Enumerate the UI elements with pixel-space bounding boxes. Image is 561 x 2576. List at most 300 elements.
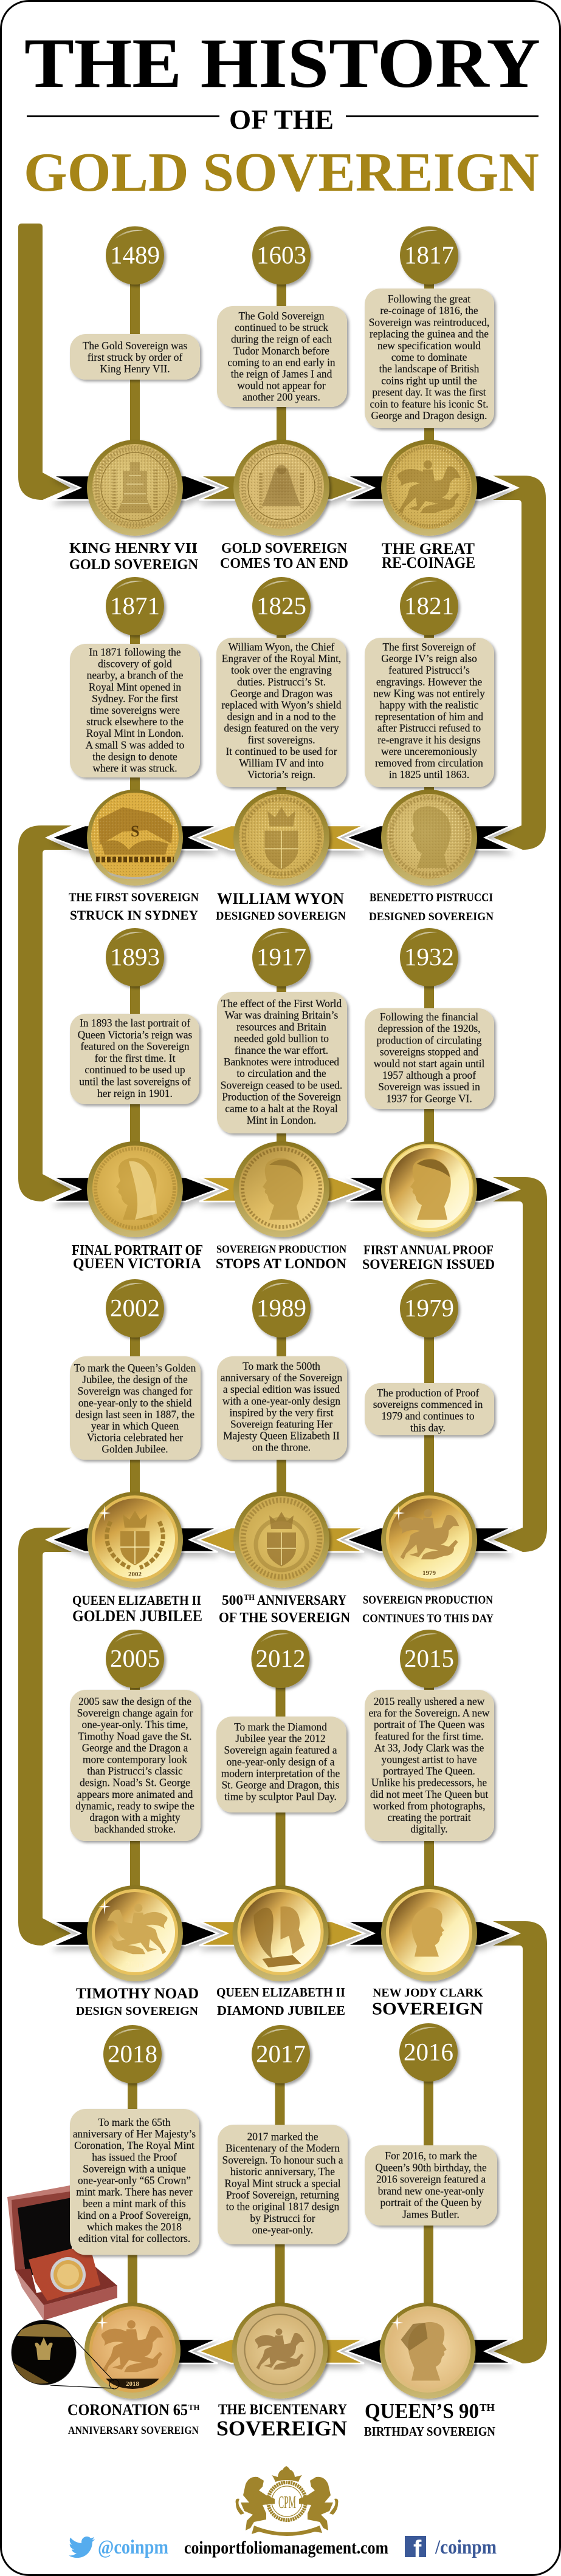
text box: removed from circulation (375, 757, 483, 769)
text box: to circulation and the (236, 1067, 326, 1079)
year badge (400, 928, 458, 986)
text box: continued to be struck (235, 321, 328, 333)
coin (232, 2303, 328, 2399)
text box: The first Sovereign of (382, 641, 476, 653)
year badge: 1817 (404, 241, 454, 268)
text box: this day. (410, 1421, 446, 1433)
panel: 1821 (365, 577, 494, 923)
ribbon arrows: row 1 (52, 476, 512, 500)
text box: dragon with a mighty (89, 1811, 181, 1823)
text box (218, 2125, 348, 2244)
title: SOVEREIGN (216, 2417, 347, 2441)
year badge (106, 577, 164, 635)
twitter handle: @coinpm (98, 2537, 168, 2558)
heading: Of The: OF THE (229, 104, 334, 135)
year badge (400, 1279, 458, 1338)
title: STRUCK IN SYDNEY (70, 907, 198, 923)
text box: 2016 sovereign featured a (376, 2173, 486, 2185)
facebook handle: /coinpm (435, 2537, 497, 2558)
coin: 2005 (126, 1960, 144, 1970)
ribbon arrows: row 2 (52, 825, 512, 850)
text box: portrait of The Queen was (374, 1718, 484, 1730)
text box (365, 2145, 497, 2226)
title: KING HENRY VII (69, 541, 198, 556)
title: CORONATION 65 (67, 2401, 188, 2419)
coin: S (131, 822, 139, 840)
text box: design and in a nod to the (227, 711, 336, 723)
text box: appears more animated and (77, 1788, 193, 1800)
ribbon arrows: row 3 (52, 1177, 512, 1201)
text box: year in which Queen (91, 1420, 179, 1432)
coin: 1979 (422, 1570, 436, 1577)
text box: one-year-only “65 Crown” (78, 2175, 191, 2187)
coin (381, 440, 477, 536)
text box: were unceremoniously (381, 745, 477, 757)
icon: twitter bird (69, 2537, 95, 2558)
year badge: 1825 (256, 592, 306, 620)
text box (365, 1008, 494, 1109)
text box: At 33, Jody Clark was the (374, 1741, 484, 1754)
logo: CPM crest (236, 2466, 338, 2536)
text box (216, 638, 346, 787)
panel: 2016 (364, 2023, 497, 2439)
year badge: 2002 (110, 1294, 160, 1322)
logo: CPM crest: CPM (278, 2493, 296, 2512)
title: THE GREAT (382, 540, 475, 558)
title: SOVEREIGN PRODUCTION (216, 1243, 346, 1255)
year badge (252, 1279, 311, 1338)
coin (233, 1141, 329, 1237)
text box: For 2016, to mark the (385, 2150, 477, 2162)
text box: The Gold Sovereign (238, 310, 325, 322)
text box: William Wyon, the Chief (229, 641, 335, 653)
text box: in 1825 until 1863. (389, 768, 469, 781)
text box: Following the financial (380, 1011, 478, 1023)
coin: 2002 (128, 1571, 142, 1578)
ribbon arrows: row 4 (52, 1528, 512, 1552)
ribbon (252, 2526, 322, 2536)
text box: one-year-only. This time, (82, 1718, 188, 1730)
text box: Sovereign featuring Her (230, 1418, 332, 1430)
text box (365, 638, 494, 787)
title: ANNIVERSARY (257, 1593, 346, 1608)
text box: worked from photographs, (373, 1800, 485, 1812)
text box: Tudor Monarch before (233, 344, 329, 357)
text box: Sovereign ceased to be used. (221, 1079, 342, 1091)
text box: by Pistrucci for (250, 2212, 315, 2224)
year badge: 1932 (404, 943, 454, 971)
footer: social links (69, 2536, 497, 2563)
text box: Queen’s 90th birthday, the (375, 2161, 487, 2173)
text box: first sovereigns. (247, 734, 315, 746)
text box: a special edition was issued (223, 1383, 340, 1395)
text box: Timothy Noad gave the St. (78, 1730, 192, 1742)
title: THE FIRST SOVEREIGN (69, 890, 199, 904)
text box: 1957 although a proof (382, 1069, 476, 1081)
title: The History of the Gold Sovereign (24, 24, 540, 203)
coin: 2018 (126, 2380, 140, 2388)
text box: depression of the 1920s, (377, 1022, 481, 1034)
title: SOVEREIGN PRODUCTION (363, 1594, 494, 1607)
title: TH (480, 2402, 495, 2413)
text box: new specification would (377, 340, 481, 352)
text box: one-year-only to the shield (78, 1396, 192, 1409)
text box: In 1893 the last portrait of (80, 1017, 190, 1029)
text box: replaced with Wyon’s shield (221, 699, 342, 711)
text box: backhanded stroke. (94, 1823, 176, 1835)
text box: To mark the 65th (98, 2116, 171, 2128)
year badge: 1917 (256, 943, 306, 971)
year badge (400, 226, 458, 284)
panel: 1871 (69, 577, 200, 923)
text box: discovery of gold (98, 658, 172, 670)
text box: Victoria celebrated her (87, 1432, 183, 1444)
year badge (252, 577, 311, 635)
title: GOLD SOVEREIGN (69, 557, 199, 573)
title: 500 (222, 1593, 243, 1608)
year badge (106, 928, 164, 986)
title: THE BICENTENARY (218, 2402, 347, 2417)
text box: Royal Mint in London. (86, 727, 184, 739)
panel: 1989 (217, 1279, 350, 1625)
text box: anniversary of Her Majesty’s (73, 2128, 196, 2140)
text box (70, 334, 200, 380)
coin (233, 1492, 329, 1588)
text box: struck elsewhere to the (86, 716, 184, 728)
title (67, 2401, 200, 2436)
text box (217, 1356, 347, 1460)
text box: modern interpretation of the (221, 1767, 340, 1779)
title: QUEEN’S 90 (365, 2399, 479, 2423)
text box: inspired by the very first (230, 1406, 334, 1418)
text box (217, 992, 347, 1133)
text box: the landscape of British (379, 363, 480, 375)
panel: 1917 (216, 928, 347, 1271)
gift box photograph (7, 2185, 117, 2320)
text box: her reign in 1901. (97, 1087, 173, 1099)
text box: dynamic, ready to swipe the (75, 1800, 194, 1812)
text box: came to a halt at the Royal (225, 1102, 338, 1115)
text box: Sovereign was changed for (78, 1385, 193, 1397)
title (76, 1986, 199, 2018)
coin (233, 790, 329, 886)
text box: Jubilee year the 2012 (235, 1732, 326, 1744)
text box: mint mark. There has never (76, 2186, 193, 2198)
text box: era for the Sovereign. A new (369, 1707, 490, 1719)
panel: 2015 (365, 1630, 494, 2019)
text box: 1937 for George VI. (386, 1092, 472, 1104)
text box: George IV’s reign also (381, 652, 477, 664)
text box: Sovereign again featured a (224, 1744, 337, 1756)
text box: with a one-year-only design (222, 1395, 340, 1407)
text box (70, 1014, 199, 1104)
text box: Unlike his predecessors, he (371, 1777, 487, 1789)
inset: crown mint mark magnifier (12, 2320, 119, 2389)
text box: William IV and into (239, 757, 324, 769)
text box: would not start again until (374, 1057, 484, 1070)
year badge: 2018 (108, 2040, 157, 2068)
text box: nearby, a branch of the (87, 669, 184, 682)
text box: re-engrave it his designs (377, 734, 481, 746)
text box: kind on a Proof Sovereign, (78, 2209, 191, 2221)
title: DESIGN SOVEREIGN (76, 2004, 198, 2018)
text box: Royal Mint opened in (89, 681, 181, 693)
text box: for the first time. It (95, 1052, 176, 1064)
title: TIMOTHY NOAD (76, 1986, 199, 2002)
text box: would not appear for (237, 380, 326, 392)
year badge (252, 226, 311, 284)
coin (87, 1885, 183, 1981)
text box: James Butler. (402, 2209, 459, 2221)
title (362, 1594, 494, 1625)
text box: A small S was added to (86, 739, 185, 751)
ribbon arrows: row 5 (52, 1921, 512, 1946)
panel: 2002 (70, 1279, 202, 1625)
coin (379, 2303, 475, 2399)
text box: design last seen in 1887, the (75, 1408, 194, 1420)
title (219, 1593, 350, 1625)
text box: sovereigns stopped and (380, 1046, 478, 1058)
title: ANNIVERSARY SOVEREIGN (68, 2424, 199, 2436)
year badge (400, 1630, 458, 1688)
text box: did not meet The Queen but (370, 1788, 488, 1800)
text box: To mark the Queen’s Golden (74, 1362, 196, 1374)
text box (216, 1717, 346, 1812)
year badge: 1893 (110, 943, 160, 971)
text box: replacing the guinea and the (370, 328, 489, 340)
text box: digitally. (410, 1823, 448, 1835)
text box: King Henry VII. (100, 363, 170, 375)
text box: which makes the 2018 (87, 2221, 182, 2233)
title (216, 1985, 345, 2018)
year badge (106, 1630, 164, 1688)
text box: time sovereigns were (90, 704, 180, 716)
title: FINAL PORTRAIT OF (72, 1243, 203, 1259)
year badge: 2017 (256, 2040, 306, 2068)
text box: featured on the Sovereign (80, 1040, 190, 1053)
text box: duties. Pistrucci’s St. (237, 675, 326, 688)
text box (70, 2109, 199, 2255)
text box: creating the portrait (387, 1811, 471, 1823)
text box: come to dominate (391, 351, 467, 363)
text box: featured Pistrucci’s (388, 664, 470, 676)
text box: 2017 marked the (247, 2131, 318, 2143)
text box: continued to be used up (84, 1064, 185, 1076)
text box: one-year-only design of a (227, 1755, 335, 1768)
crown (272, 2466, 302, 2482)
year badge: 2015 (404, 1644, 454, 1672)
title (364, 2399, 495, 2439)
panel: 1979 (362, 1279, 494, 1625)
text box: coming to an end early in (227, 356, 336, 368)
year badge (106, 1279, 164, 1338)
text box: Royal Mint struck a special (224, 2177, 341, 2189)
text box (70, 1690, 201, 1841)
year badge: 1821 (404, 592, 454, 620)
text box: has issued the Proof (92, 2151, 177, 2163)
text box: design. Noad’s St. George (80, 1777, 190, 1789)
text box: time by sculptor Paul Day. (224, 1791, 337, 1803)
year badge: 2016 (404, 2038, 453, 2066)
text box: Sydney. For the first (92, 692, 178, 705)
coin (232, 1885, 328, 1981)
text box: George and Dragon design. (371, 409, 487, 422)
text box: took over the engraving (231, 664, 332, 676)
panel: 1893 (70, 928, 203, 1272)
panel: 2017 (216, 2025, 348, 2441)
text box: new King was not entirely (373, 687, 485, 699)
year badge: 1603 (256, 241, 306, 268)
text box: The production of Proof (377, 1387, 479, 1399)
text box: Victoria’s reign. (247, 768, 315, 781)
title: DESIGNED SOVEREIGN (216, 909, 346, 923)
title: QUEEN ELIZABETH II (72, 1593, 201, 1608)
year badge: 2005 (110, 1644, 160, 1672)
text box: until the last sovereigns of (79, 1075, 191, 1087)
year badge (252, 1630, 310, 1688)
year badge: 1989 (256, 1294, 306, 1322)
title: DIAMOND JUBILEE (217, 2003, 345, 2018)
title: QUEEN VICTORIA (73, 1256, 202, 1272)
text box: It continued to be used for (225, 745, 337, 757)
text box (70, 1356, 201, 1460)
panel: 1932 (362, 928, 495, 1272)
text box: after Pistrucci refused to (377, 722, 481, 734)
coin (87, 790, 183, 886)
text box: edition vital for collectors. (78, 2232, 190, 2244)
coin (87, 1492, 183, 1588)
text box: The effect of the First World (221, 997, 342, 1010)
title: WILLIAM WYON (217, 890, 344, 907)
title: GOLD SOVEREIGN (221, 541, 348, 556)
text box: St. George and Dragon, this (222, 1778, 340, 1791)
title: SOVEREIGN ISSUED (362, 1257, 495, 1272)
title: BIRTHDAY SOVEREIGN (364, 2424, 495, 2439)
text box: War was draining Britain’s (225, 1009, 338, 1021)
text box: sovereigns commenced in (373, 1398, 483, 1410)
text box (217, 306, 347, 407)
title: FIRST ANNUAL PROOF (363, 1242, 494, 1257)
text box: been a mint mark of this (83, 2198, 186, 2210)
text box: featured for the first time. (374, 1730, 484, 1742)
year badge (103, 2025, 162, 2083)
text box: Sovereign. To honour such a (222, 2154, 343, 2166)
text box: Sovereign was issued in (378, 1081, 480, 1093)
text box: resources and Britain (236, 1020, 326, 1033)
title: NEW JODY CLARK (373, 1986, 483, 2000)
text box: Bicentenary of the Modern (225, 2142, 340, 2154)
year badge (252, 928, 311, 986)
title: TH (188, 2403, 200, 2412)
ribbon arrows: row 6 (170, 2339, 512, 2363)
text box (365, 1383, 494, 1435)
heading: Gold Sovereign: GOLD SOVEREIGN (24, 142, 539, 203)
text box: Sovereign change again for (77, 1707, 193, 1719)
icon: facebook: f (413, 2536, 422, 2563)
title: RE-COINAGE (382, 554, 475, 572)
title (382, 540, 475, 572)
text box: production of circulating (377, 1034, 482, 1046)
year badge: 2012 (255, 1644, 305, 1672)
title (220, 541, 348, 572)
coin (87, 1141, 183, 1237)
title: BENEDETTO PISTRUCCI (370, 892, 493, 904)
text box: more contemporary look (83, 1753, 187, 1765)
title (72, 1593, 202, 1625)
text box: engravings. However the (376, 675, 482, 688)
text box: than Pistrucci’s classic (87, 1765, 183, 1777)
heading: The History: THE HISTORY (24, 24, 540, 103)
text box: Sovereign with a unique (83, 2162, 186, 2175)
year badge (106, 226, 164, 284)
panel: 1603 (217, 226, 348, 572)
year badge (399, 2023, 458, 2082)
text box: the design to denote (92, 750, 177, 762)
text box: Sovereign was reintroduced, (369, 316, 489, 328)
text box: Following the great (388, 293, 470, 305)
title: TH (244, 1593, 255, 1602)
text box: Engraver of the Royal Mint, (222, 652, 341, 664)
text box: coin to feature his iconic St. (370, 398, 489, 410)
text box: where it was struck. (92, 762, 177, 774)
coin (381, 790, 477, 886)
text box (70, 644, 200, 777)
right lion (299, 2477, 333, 2530)
text box: Golden Jubilee. (102, 1443, 168, 1455)
text box: one-year-only. (252, 2224, 313, 2236)
text box: portrayed The Queen. (383, 1765, 475, 1777)
text box: another 200 years. (243, 391, 320, 403)
title (69, 890, 199, 923)
text box (365, 289, 494, 428)
text box: The Gold Sovereign was (83, 340, 187, 352)
text box: Queen Victoria’s reign was (78, 1028, 192, 1040)
text box: 2005 saw the design of the (78, 1695, 191, 1707)
title: OF THE SOVEREIGN (219, 1610, 350, 1625)
text box: finance the war effort. (235, 1044, 328, 1056)
title: STOPS AT LONDON (216, 1256, 346, 1271)
text box: George and Dragon was (230, 687, 332, 699)
coin (381, 1141, 477, 1237)
text box: To mark the Diamond (234, 1721, 327, 1733)
text box: In 1871 following the (89, 646, 181, 658)
title: SOVEREIGN (372, 2000, 483, 2019)
text box: George and the Dragon a (82, 1741, 188, 1754)
icon: facebook (405, 2536, 426, 2563)
text box: happy with the realistic (380, 699, 479, 711)
panel: 2012 (216, 1630, 346, 2018)
text box: To mark the 500th (243, 1360, 320, 1372)
text box (365, 1690, 494, 1841)
text box: Coronation, The Royal Mint (74, 2139, 194, 2151)
timeline path: serpentine bars (18, 224, 547, 2363)
title (216, 890, 346, 923)
title: DESIGNED SOVEREIGN (369, 910, 494, 923)
panel: 1825 (216, 577, 346, 923)
title (369, 892, 494, 923)
title: CONTINUES TO THIS DAY (362, 1612, 494, 1625)
panel: 2018 (67, 2025, 200, 2436)
text box: needed gold bullion to (234, 1033, 329, 1045)
title: QUEEN ELIZABETH II (216, 1985, 345, 2000)
text box: Mint in London. (247, 1114, 316, 1126)
year badge: 1871 (110, 592, 160, 620)
text box: portrait of the Queen by (380, 2196, 482, 2209)
text box: design featured on the very (224, 722, 339, 734)
text box: Majesty Queen Elizabeth II (223, 1430, 340, 1442)
left lion (241, 2477, 275, 2530)
text box: 1979 and continues to (381, 1410, 475, 1422)
